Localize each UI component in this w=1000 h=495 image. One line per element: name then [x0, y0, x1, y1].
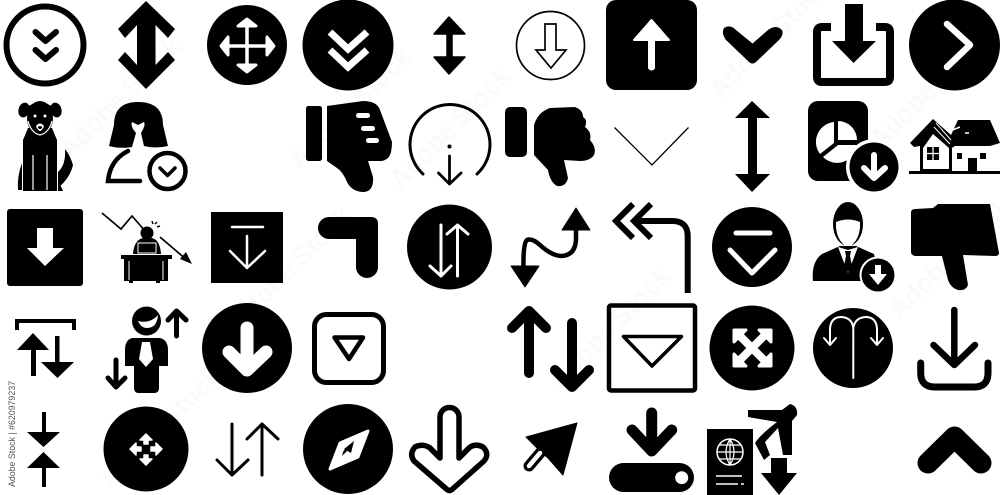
- icon: passport and plane: [707, 404, 797, 495]
- text: stock credit: Adobe Stock | #620979237: [7, 381, 18, 487]
- watermark: Adobe Stock: [53, 30, 187, 164]
- icon: thin chevron: [614, 128, 688, 165]
- icon: squiggle arrow: [511, 208, 590, 287]
- icon: bold up and down arrows: [512, 311, 589, 387]
- icon: four-way arrow circle: [207, 5, 287, 85]
- icon: double chevron elbow arrow: [616, 204, 688, 293]
- icon: thumbs down outline bars: [306, 101, 392, 192]
- icon: small four-way arrows circle: [104, 406, 188, 492]
- icon: thumbs down fist: [505, 107, 595, 186]
- icon: thin up-down arrows: [217, 424, 278, 475]
- watermark: Adobe Stock: [383, 60, 517, 194]
- icon: businessman download: [813, 202, 896, 294]
- icon: small up-down arrow: [434, 17, 465, 74]
- icon: double chevron circle: [302, 0, 394, 90]
- icon: outlined down arrow: [412, 408, 487, 490]
- icon: expand X circle: [710, 306, 794, 390]
- icon: thin down arrow in square: [211, 212, 283, 283]
- icon: smiling businessman with arrows: [108, 306, 186, 393]
- icon: bold up chevron: [928, 437, 981, 463]
- icon: down arrow in square: [7, 209, 83, 286]
- watermark: Adobe Stock: [223, 200, 357, 334]
- icon: boomerang chevron: [723, 26, 783, 63]
- icon: flat thumbs down: [911, 204, 999, 290]
- icon: chevron with bar circle: [712, 207, 792, 287]
- icon: rounded corner arrow: [318, 217, 378, 278]
- icon: woman with check: [108, 102, 186, 189]
- icon: bold up-down arrow: [118, 1, 175, 89]
- icon: stressed worker with falling chart: [102, 213, 192, 283]
- icon: forked arrows circle: [813, 308, 893, 388]
- icon: up-down arrows circle: [407, 204, 492, 290]
- watermark: Adobe Stock: [93, 360, 227, 494]
- icon: triangle in rounded square: [314, 314, 384, 382]
- icon: compress arrows: [27, 412, 60, 487]
- icon: arc with down arrow: [410, 104, 490, 184]
- icon: bracket with up and down arrows: [17, 321, 74, 378]
- icon: download line tray: [921, 310, 988, 387]
- icon: download to pill: [609, 413, 694, 492]
- icon: download to tray: [817, 4, 890, 82]
- icon: up arrow in rounded square: [606, 0, 697, 90]
- icon: dog: [17, 101, 73, 191]
- watermark: Adobe Stock: [863, 20, 997, 154]
- watermark: Adobe Stock: [543, 260, 677, 394]
- icon: pie chart document download: [808, 101, 902, 195]
- icon: compass: [303, 404, 393, 494]
- icon: thin ring down arrow: [516, 12, 584, 80]
- watermark: Adobe Stock: [283, 40, 417, 174]
- icon: right chevron circle: [909, 0, 1000, 90]
- icon: damaged house: [909, 119, 1000, 174]
- icon: double chevron in ring: [6, 6, 84, 84]
- icon: bold down arrow circle: [202, 303, 292, 393]
- icon: cursor arrow: [526, 423, 577, 475]
- icon: tall up-down arrow: [735, 101, 770, 192]
- icon: triangle in square outline: [609, 306, 695, 390]
